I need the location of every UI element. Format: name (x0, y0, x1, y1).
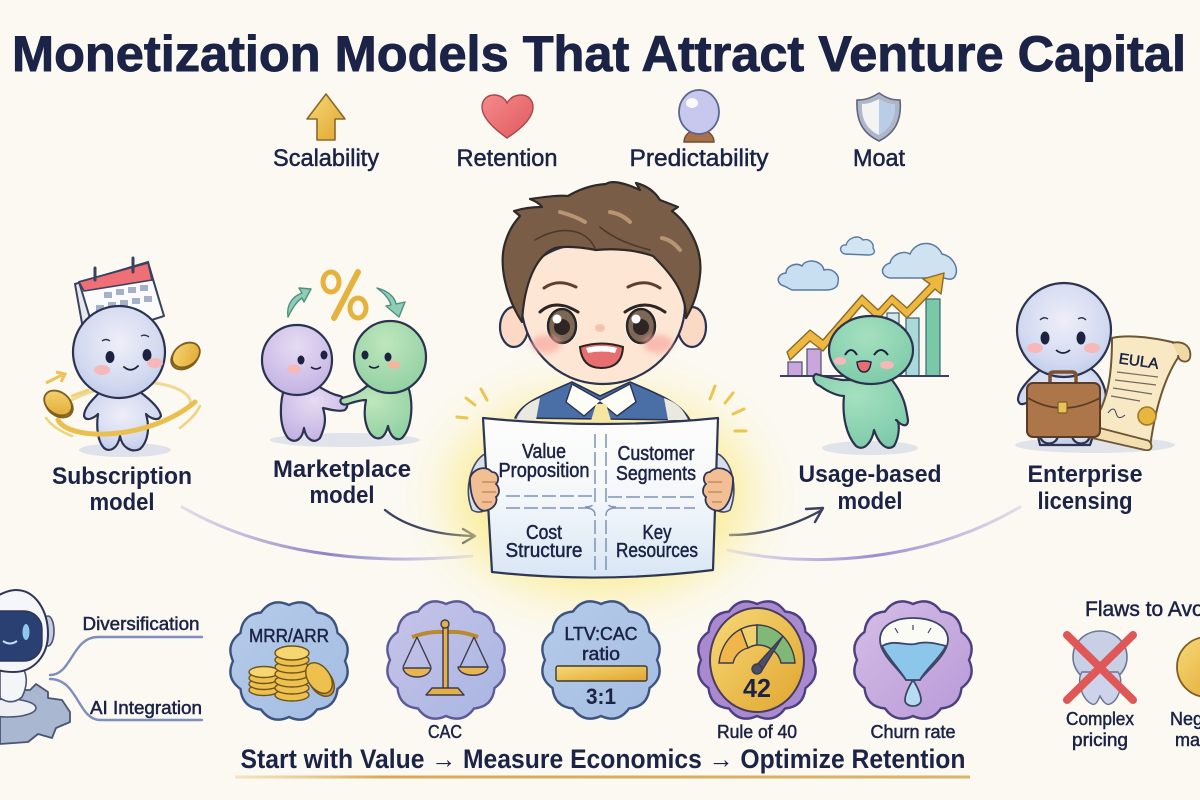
suit (515, 382, 690, 424)
box: key resources: Resources (616, 540, 698, 562)
icon: scroll (1083, 336, 1190, 450)
decoration: orbit ring front (46, 390, 200, 436)
icon: green arrow left (288, 288, 311, 317)
icon: scroll: EULA (1118, 350, 1160, 373)
eyebrows (544, 283, 660, 288)
shadow (822, 441, 918, 455)
arrow: long curve left (182, 507, 472, 559)
box: customer segments: Customer (618, 443, 695, 465)
box: value proposition: Proposition (498, 460, 590, 482)
character: green head (829, 316, 913, 384)
label: retention: Retention (456, 145, 558, 172)
badge: LTV:CAC ratio: 3:1 (586, 684, 616, 709)
label: diversification: Diversification (82, 614, 200, 634)
cheeks (531, 335, 673, 353)
subscription model: model (90, 489, 154, 516)
left ear (500, 307, 528, 347)
box: value proposition: Value (522, 441, 566, 463)
box: key resources (616, 522, 698, 562)
marketplace model (262, 272, 426, 509)
badge: rule of 40 (698, 601, 816, 742)
label: enterprise licensing: Enterprise (1028, 461, 1142, 488)
icon: scales (403, 620, 488, 695)
usage-based model (778, 237, 956, 515)
right ear (678, 307, 706, 347)
icon: left cloud (778, 261, 838, 290)
box: key resources: Key (642, 522, 672, 544)
mouth (580, 344, 623, 368)
character: green body (813, 374, 908, 448)
label: scalability: Scalability (273, 145, 379, 172)
badge: LTV:CAC ratio (542, 601, 660, 719)
flaw: complex pricing (1066, 631, 1134, 750)
ratio bar (556, 666, 647, 681)
icon: right coin (166, 337, 205, 375)
flaw: complex pricing: Complex (1066, 709, 1134, 729)
glow behind canvas (450, 395, 750, 595)
right sleeve (708, 450, 734, 512)
robot ear (42, 616, 54, 646)
shadow (1015, 437, 1175, 453)
shadow (79, 443, 171, 457)
gauge (719, 625, 795, 674)
icon: arrow (46, 372, 65, 383)
feet (1040, 436, 1090, 444)
icon: shield (857, 93, 900, 141)
badge: MRR/ARR (230, 602, 348, 720)
central founder character (457, 182, 746, 578)
marketplace model: model (310, 482, 374, 509)
badge: LTV:CAC ratio: LTV:CAC (564, 624, 638, 644)
label: subscription model: Subscription (52, 463, 192, 490)
hair (503, 182, 700, 322)
principles row (273, 90, 905, 172)
icon: green arrow right (377, 288, 405, 317)
usage-based model: model (838, 488, 902, 515)
flaws to avoid (1066, 598, 1200, 750)
arrow: long curve right (728, 507, 1020, 560)
label: marketplace model: Marketplace (273, 456, 411, 483)
icon: left coin (39, 385, 78, 423)
box: customer segments: Segments (616, 463, 696, 485)
flaw: complex pricing: pricing (1072, 730, 1128, 750)
flaw: negative margins (1170, 637, 1200, 750)
label: predictability: Predictability (630, 145, 768, 172)
enterprise licensing: licensing (1038, 488, 1132, 515)
badge: churn rate (854, 601, 972, 742)
icon: small cloud (841, 237, 874, 255)
right hand (703, 468, 733, 511)
left sleeve (468, 450, 495, 512)
box: customer segments (616, 443, 696, 485)
hair strands and highlights (535, 212, 680, 250)
connector: diversification (50, 637, 202, 675)
character: blue head (73, 306, 165, 398)
icon: big cloud (882, 244, 956, 279)
character: blue head (1017, 283, 1111, 377)
sparkles (457, 386, 746, 431)
label: moat: Moat (853, 145, 905, 172)
badge: rule of 40: 42 (743, 673, 771, 703)
icon: heart (482, 95, 533, 138)
box: cost structure: Cost (526, 522, 562, 544)
badge: MRR/ARR: MRR/ARR (249, 626, 329, 646)
box: value proposition (498, 441, 590, 482)
character: blue body (1018, 368, 1106, 445)
robot on gear (0, 590, 202, 744)
icon: crystal ball (679, 90, 719, 142)
badge: rule of 40: Rule of 40 (717, 722, 797, 742)
badge: churn rate: Churn rate (870, 722, 956, 742)
badge: CAC (387, 601, 505, 742)
character: purple (262, 325, 347, 441)
robot visor (0, 611, 42, 661)
icon: coin stack (249, 646, 340, 701)
eyes (540, 305, 665, 345)
box: cost structure: Structure (506, 540, 582, 562)
arrow: marketplace to canvas (385, 510, 475, 543)
grid dashes (506, 434, 695, 570)
face (521, 242, 685, 384)
label: AI integration: AI Integration (90, 698, 202, 718)
icon: percent (323, 272, 366, 318)
subscription model (39, 258, 205, 516)
gear (0, 684, 70, 744)
arrow: canvas to usage model (730, 508, 823, 535)
icon: scalability arrow (307, 94, 345, 140)
decoration: orbit ring back (60, 383, 191, 410)
badge: LTV:CAC ratio: ratio (582, 644, 620, 664)
shadow (270, 433, 420, 447)
icon: briefcase (1027, 372, 1100, 437)
character: green (340, 321, 426, 439)
character: blue body (84, 392, 161, 450)
enterprise licensing (1015, 283, 1190, 515)
box: cost structure (506, 522, 582, 562)
icon: leaky funnel (880, 618, 948, 706)
badge: CAC: CAC (428, 722, 462, 742)
bar chart (780, 299, 949, 376)
robot helmet (0, 590, 48, 672)
icon: calendar (75, 258, 164, 340)
left hand (470, 468, 499, 511)
robot body (0, 665, 26, 702)
connector: AI integration (50, 679, 202, 720)
business canvas paper (483, 418, 718, 578)
tagline: Start with Value → Measure Economics → Optimize Retention (240, 744, 966, 774)
title: Monetization Models That Attract Venture Capital (12, 26, 1186, 82)
label: usage-based model: Usage-based (798, 461, 942, 488)
growth arrow (787, 273, 944, 360)
nose (595, 324, 605, 332)
